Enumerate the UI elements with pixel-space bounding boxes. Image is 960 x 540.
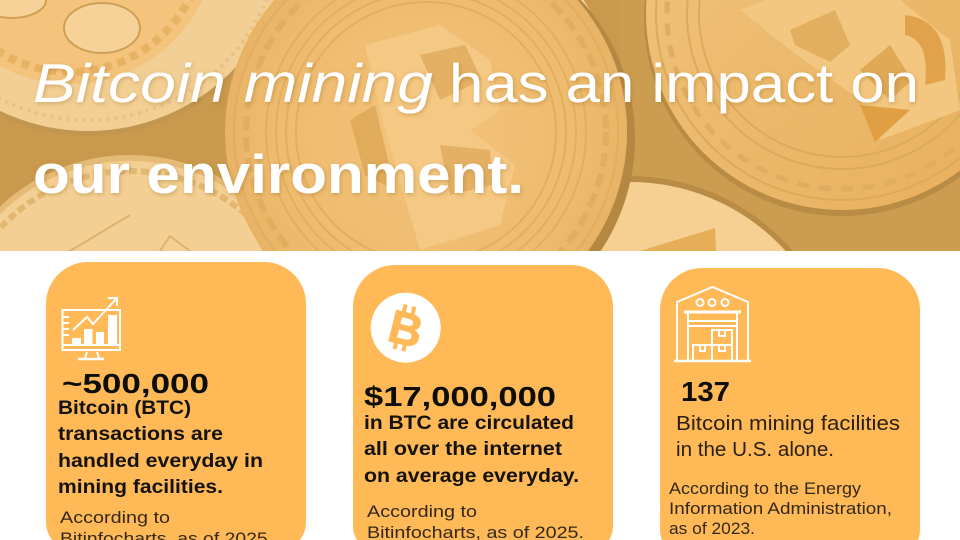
title [33, 52, 919, 205]
description: in BTC are circulated [364, 412, 574, 434]
description [676, 413, 900, 461]
icon: warehouse [674, 287, 751, 361]
description: all over the internet [364, 438, 563, 460]
icon: bitcoin coin: B [383, 299, 428, 358]
statistic: ~500,000 [62, 368, 209, 399]
description [364, 412, 579, 487]
right bitcoin coin [644, 0, 960, 216]
source note [60, 511, 267, 540]
description: on average everyday. [364, 465, 579, 487]
panel: facilities [660, 268, 920, 540]
title: Bitcoin mining [33, 52, 433, 114]
source note: as of 2023. [669, 519, 755, 538]
source note: According to [60, 508, 170, 527]
description: handled everyday in [58, 450, 263, 472]
source note [367, 502, 584, 540]
bottom centre pale coin [600, 176, 792, 251]
title: our environment. [33, 143, 524, 205]
bottom-left coin [0, 155, 264, 251]
icon: chart on monitor [62, 298, 120, 359]
description [58, 397, 263, 498]
statistic: 137 [681, 376, 730, 407]
panel: circulation [353, 265, 613, 540]
top-left coin [0, 0, 293, 136]
description: Bitcoin (BTC) [58, 397, 191, 419]
source note [669, 479, 892, 538]
top centre pale coin [581, 0, 590, 11]
description: in the U.S. alone. [676, 439, 834, 461]
description: mining facilities. [58, 476, 223, 498]
description: Bitcoin mining facilities [676, 413, 900, 435]
source note: According to the Energy [669, 479, 862, 498]
icon: bitcoin coin [371, 293, 441, 363]
statistic: $17,000,000 [364, 381, 556, 412]
source note: According to [367, 502, 477, 521]
title: has an impact on [449, 52, 919, 114]
description: transactions are [58, 423, 223, 445]
centre bitcoin coin [225, 0, 635, 251]
header photo: gold coins [0, 0, 960, 251]
source note: Information Administration, [669, 499, 892, 518]
panel: transactions [46, 262, 306, 540]
